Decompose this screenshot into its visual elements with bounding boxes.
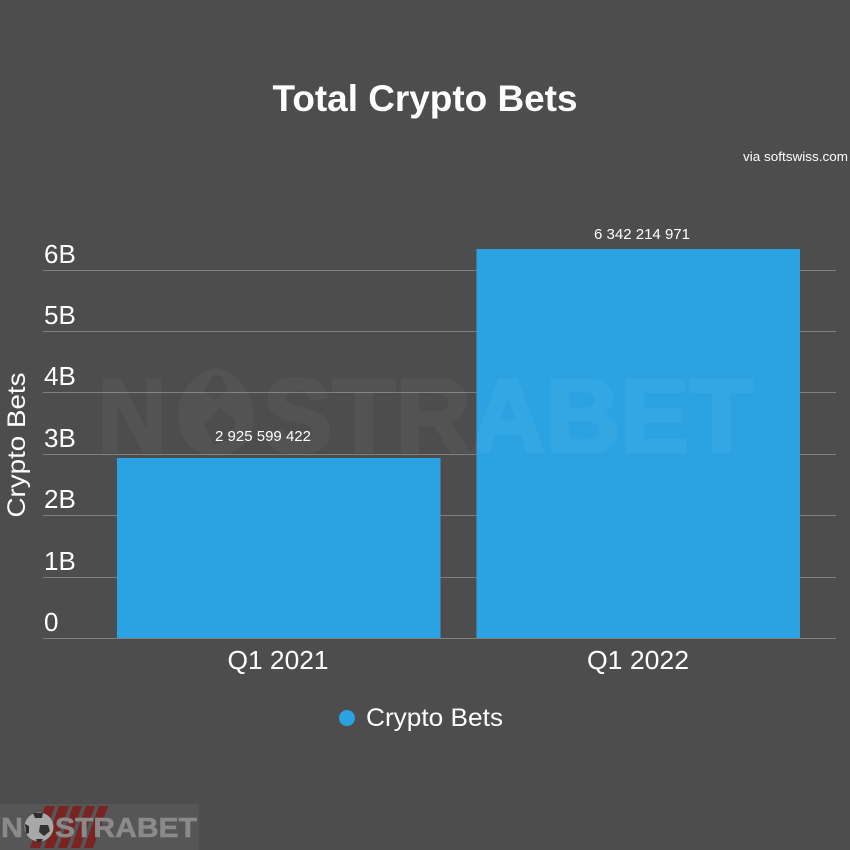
value label: Q1 2021: 2 925 599 422 — [215, 428, 311, 445]
logo wordmark N: N — [1, 812, 23, 843]
bar: Q1 2021 — [117, 458, 440, 638]
value label: Q1 2022: 6 342 214 971 — [594, 226, 690, 243]
y axis labels: 0 — [44, 607, 58, 637]
logo wordmark STRABET: STRABET — [55, 812, 197, 843]
x axis label: Q1 2021: Q1 2021 — [228, 645, 328, 675]
gridlines — [43, 270, 836, 638]
y axis labels: 3B — [44, 423, 76, 453]
source note: via softswiss.com — [743, 149, 848, 164]
watermark: N — [98, 358, 166, 475]
y axis title: Crypto Bets — [3, 372, 31, 518]
logo stripes — [30, 806, 108, 848]
y axis labels: 2B — [44, 484, 76, 514]
y axis labels: 5B — [44, 300, 76, 330]
logo: Nostrabet — [0, 804, 199, 850]
y axis labels — [44, 239, 76, 637]
legend marker — [339, 710, 355, 726]
legend — [339, 704, 503, 732]
x axis label: Q1 2022: Q1 2022 — [587, 645, 689, 675]
logo soccer ball — [24, 812, 54, 842]
watermark: STRABET — [263, 358, 753, 475]
y axis labels: 6B — [44, 239, 76, 269]
legend label: Crypto Bets — [366, 704, 503, 732]
y axis labels: 4B — [44, 361, 76, 391]
chart: crypto bets by quarter — [3, 226, 836, 675]
y axis labels: 1B — [44, 546, 76, 576]
title: Total Crypto Bets — [272, 78, 578, 119]
bar: Q1 2022 — [476, 249, 800, 638]
